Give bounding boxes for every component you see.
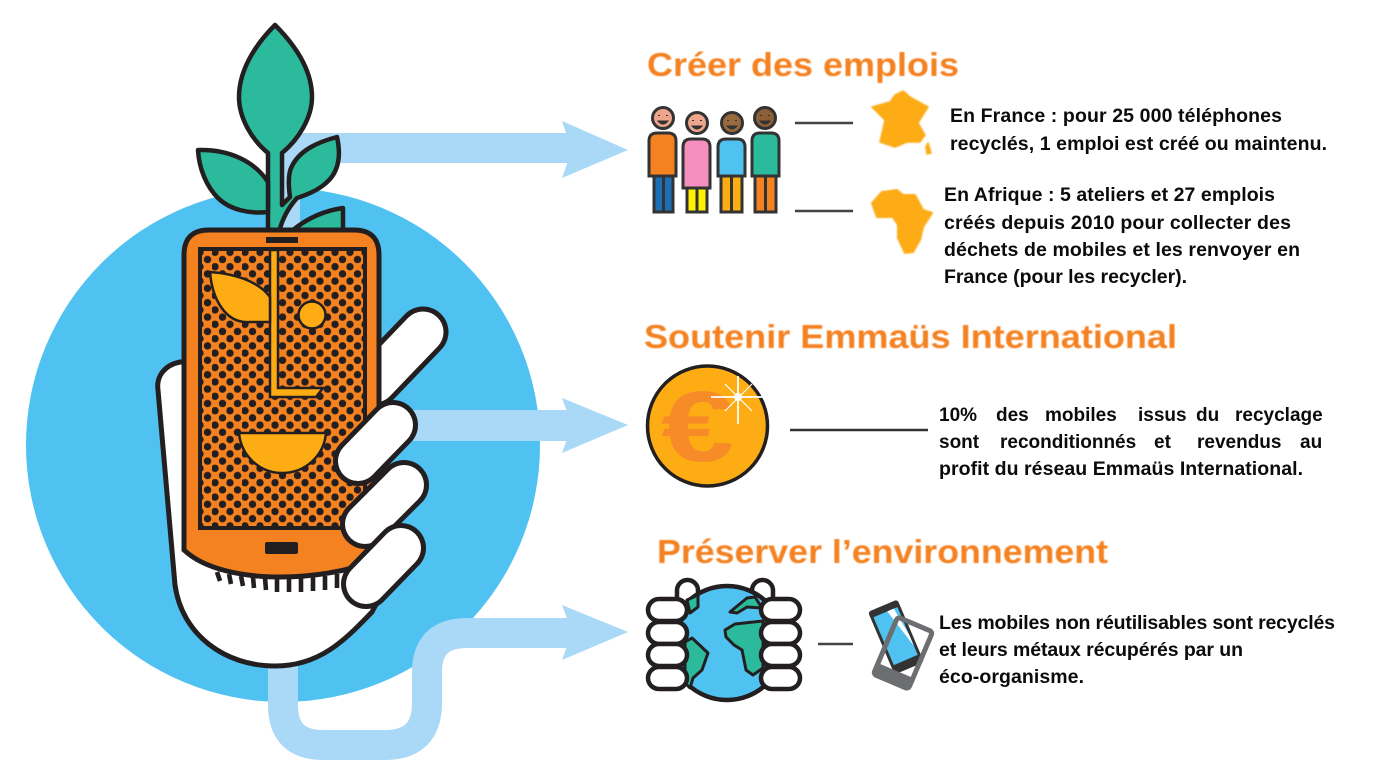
text: Emmaüs: revendus	[1197, 432, 1281, 453]
back finger	[375, 332, 423, 382]
connector line: environment	[818, 643, 853, 645]
text: France: En France : pour 25 000 téléphones	[950, 105, 1282, 127]
text: Africa: En Afrique : 5 ateliers et 27 emplois	[944, 184, 1275, 206]
fingers	[358, 425, 404, 584]
text: Emmaüs: des	[996, 405, 1029, 426]
heading: Soutenir Emmaüs International: Soutenir Emmaüs International	[644, 318, 1177, 355]
plant	[198, 25, 343, 232]
continents	[685, 595, 763, 688]
text: Emmaüs: issus	[1138, 405, 1187, 426]
text: Africa	[944, 184, 1300, 288]
person 4	[752, 108, 779, 212]
phone screen	[200, 249, 365, 528]
arrow: to Emmaüs	[400, 398, 628, 453]
thumbs	[677, 580, 773, 620]
text: Emmaüs: profit du réseau Emmaüs International.	[939, 458, 1303, 480]
text: France: recyclés, 1 emploi est créé ou maintenu.	[950, 133, 1327, 155]
arrow: to jobs	[285, 121, 628, 240]
arrow: to environment	[283, 605, 628, 745]
phone speaker	[266, 237, 298, 243]
heading: Préserver l'environnement: Préserver l’environnement	[657, 533, 1108, 570]
globe	[670, 586, 784, 700]
text: Emmaüs	[939, 405, 1323, 480]
connector line: Emmaüs	[790, 429, 928, 431]
text: Emmaüs: 10%	[939, 405, 977, 426]
text: environment: éco-organisme.	[939, 666, 1084, 688]
heading: Créer des emplois: Créer des emplois	[647, 46, 959, 83]
text: Emmaüs: reconditionnés	[1000, 432, 1136, 453]
text: Africa: France (pour les recycler).	[944, 266, 1187, 288]
person 3	[718, 112, 745, 212]
person 2	[683, 112, 710, 212]
home button	[265, 542, 298, 554]
phone	[184, 230, 379, 592]
text: environment: Les mobiles non réutilisables sont recyclés	[939, 612, 1335, 634]
text: Emmaüs: recyclage	[1235, 405, 1323, 426]
text: Emmaüs: sont	[939, 432, 980, 453]
text: environment	[939, 612, 1335, 688]
text: Emmaüs: et	[1154, 432, 1172, 453]
hand palm	[158, 362, 400, 666]
phone body	[184, 230, 379, 577]
text: Africa: déchets de mobiles et les renvoyer en	[944, 239, 1300, 261]
palm ridge ticks	[217, 572, 349, 592]
text: Emmaüs: mobiles	[1045, 405, 1117, 426]
text: Emmaüs: au	[1300, 432, 1322, 453]
sparkle	[711, 376, 763, 424]
icon: euro coin: €	[661, 371, 734, 483]
icon: mobile phones	[868, 599, 933, 689]
icon: globe in hands	[648, 580, 800, 700]
person 1	[649, 108, 676, 212]
text: Africa: créés depuis 2010 pour collecter des	[944, 212, 1291, 234]
icon: France	[872, 91, 931, 154]
icon: euro coin	[648, 366, 768, 486]
icon: four people	[649, 108, 779, 212]
icon: Africa	[872, 190, 932, 253]
connector lines: jobs	[795, 123, 853, 211]
text: Emmaüs: du	[1196, 405, 1219, 426]
blue background circle	[26, 188, 540, 702]
screen plant	[210, 250, 326, 473]
fingers	[648, 599, 800, 689]
text: France	[950, 105, 1327, 155]
text: environment: et leurs métaux récupérés par un	[939, 639, 1243, 661]
